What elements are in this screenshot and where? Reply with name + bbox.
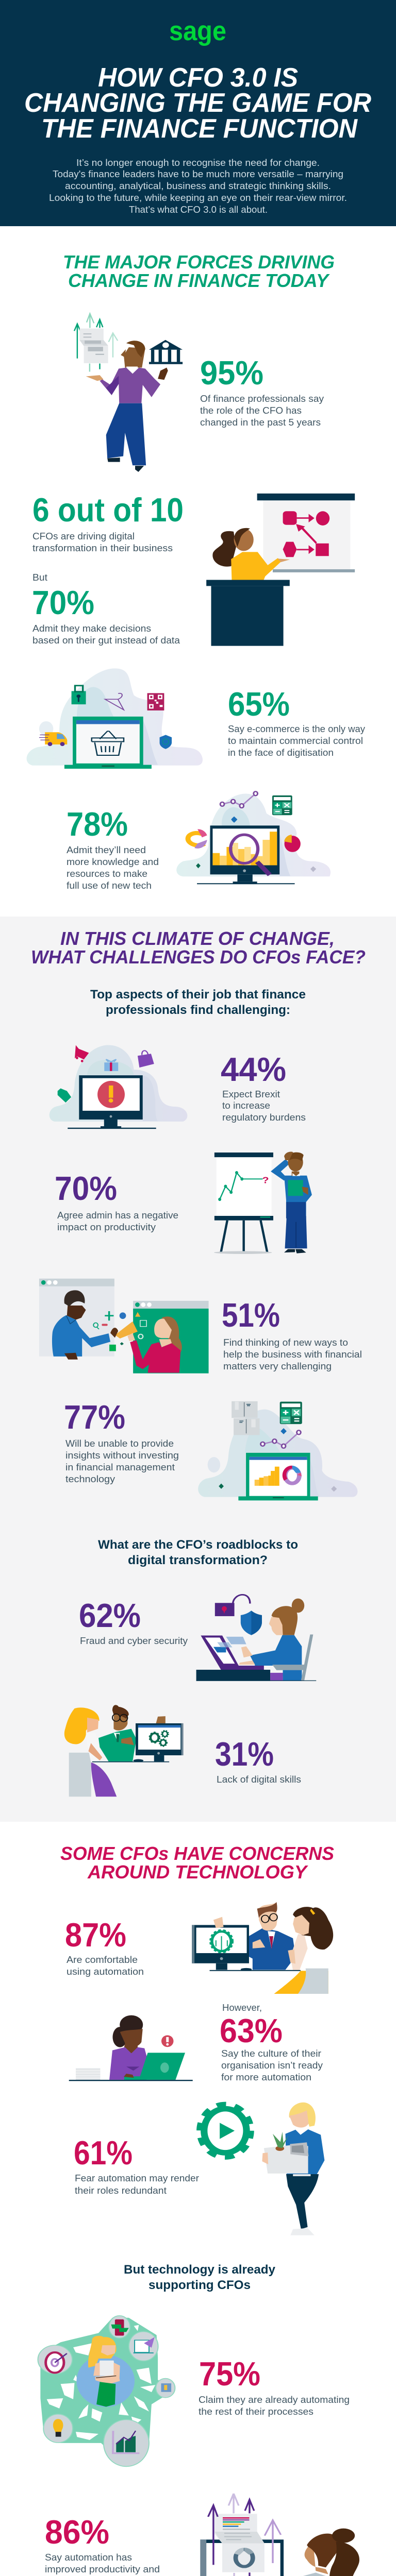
subheading: roadblocks: What are the CFO’s roadblocks to <box>98 1538 298 1552</box>
illustration: colleagues exchanging message in video windows <box>39 1279 209 1374</box>
illustration: financial management laptop <box>198 1401 358 1500</box>
intro text: Looking to the future, while keeping an eye on their rear-view mirror. <box>49 193 347 203</box>
intro text: Today's finance leaders have to be much more versatile – marrying <box>53 169 343 179</box>
stat: 87%: 87% <box>65 1916 126 1954</box>
subheading: top aspects: Top aspects of their job that finance <box>90 988 306 1002</box>
panel: challenges <box>0 917 396 1822</box>
illustration: colleagues at monitor with gears <box>64 1705 184 1797</box>
stat: 77%: 77% <box>64 1398 125 1436</box>
stat: 44%: to increase <box>222 1100 270 1111</box>
illustration: automation cog and worried worker with box <box>199 2103 324 2235</box>
illustration: man juggling document and bank <box>74 314 183 472</box>
illustration: analytics monitor <box>176 791 331 884</box>
illustration: woman at centre of network <box>38 2316 175 2466</box>
stat: 78% knowledge <box>67 805 159 891</box>
stat: 51%: matters very challenging <box>223 1361 332 1371</box>
stat: 63%: Say the culture of their <box>221 2048 321 2059</box>
illustration: confused man at easel: ? <box>262 1175 269 1185</box>
stat: 63%: organisation isn’t ready <box>221 2060 323 2071</box>
stat: 86%: Say automation has <box>45 2552 132 2563</box>
stat: 77%: insights without investing <box>65 1450 179 1461</box>
stat: 77%: in financial management <box>65 1462 175 1472</box>
stat: 95% <box>200 354 324 428</box>
stat: 78% knowledge: 78% <box>67 805 128 843</box>
heading: technology concerns: AROUND TECHNOLOGY <box>87 1861 308 1883</box>
subheading: technology supporting CFOs <box>124 2263 276 2292</box>
stat: 87%: using automation <box>67 1966 144 1977</box>
subheading: technology supporting CFOs: But technology is already <box>124 2263 276 2277</box>
stat: 78% knowledge: full use of new tech <box>67 880 152 891</box>
stat: 78% knowledge: more knowledge and <box>67 856 159 867</box>
stat: 51%: Find thinking of new ways to <box>223 1337 348 1348</box>
illustration: monitor alert <box>50 1045 187 1129</box>
stat: 63%: However, <box>222 2002 262 2013</box>
stat: 77%: Will be unable to provide <box>65 1438 174 1449</box>
stat: 86%: 86% <box>45 2513 109 2551</box>
heading: challenges: IN THIS CLIMATE OF CHANGE, <box>60 928 335 949</box>
stat: 87%: Are comfortable <box>67 1954 138 1965</box>
stat: 70% admin: 70% <box>55 1170 117 1207</box>
stat: 75%: the rest of their processes <box>199 2406 314 2417</box>
illustration: woman at monitor with rising report <box>200 2494 359 2576</box>
stat: 75%: 75% <box>199 2355 260 2393</box>
stat: 44% <box>221 1050 306 1123</box>
stat: 51%: 51% <box>222 1296 280 1334</box>
stat: 65%: to maintain commercial control <box>228 735 363 746</box>
logo: sage: sage <box>169 16 226 46</box>
stat: 65% <box>228 685 366 758</box>
stat: 65%: in the face of digitisation <box>228 747 334 758</box>
illustration: woman presenting process flow at podium <box>206 494 355 646</box>
intro text: It’s no longer enough to recognise the need for change. <box>76 158 320 168</box>
heading: major forces: THE MAJOR FORCES DRIVING <box>63 251 335 273</box>
stat: 44%: 44% <box>221 1050 286 1088</box>
stat: 70% gut decisions: But <box>32 572 47 583</box>
stat: 44%: regulatory burdens <box>222 1112 306 1123</box>
stat: 77%: technology <box>65 1473 116 1484</box>
stat: 61%: 61% <box>74 2134 133 2172</box>
panel: major forces <box>27 251 366 891</box>
stat: 31% <box>215 1735 301 1785</box>
illustration: woman on laptop with security icons <box>196 1595 316 1681</box>
illustration: confused man at easel <box>214 1152 312 1254</box>
stat: 70% admin: impact on productivity <box>57 1222 156 1232</box>
stat: 62% <box>79 1597 188 1646</box>
stat: 70% gut decisions: based on their gut instead of data <box>32 635 180 646</box>
heading: technology concerns: SOME CFOs HAVE CONCERNS <box>60 1843 334 1864</box>
heading: major forces <box>63 251 335 291</box>
stat: 95%: changed in the past 5 years <box>200 417 321 428</box>
heading: major forces: CHANGE IN FINANCE TODAY <box>68 270 330 291</box>
subheading: roadblocks: digital transformation? <box>128 1553 268 1567</box>
intro text: That’s what CFO 3.0 is all about. <box>129 205 268 215</box>
stat: 65%: Say e-commerce is the only way <box>228 723 366 734</box>
stat: 62%: 62% <box>79 1597 141 1634</box>
stat: 31%: 31% <box>215 1735 274 1773</box>
panel: header <box>0 0 396 226</box>
stat: 70% admin: Agree admin has a negative <box>57 1210 178 1221</box>
stat: 51% <box>222 1296 362 1371</box>
stat: 95%: 95% <box>200 354 263 392</box>
stat: 61%: Fear automation may render <box>75 2173 199 2183</box>
subheading: technology supporting CFOs: supporting CFOs <box>148 2278 251 2292</box>
illustration: colleagues at monitor with cog <box>192 1902 333 1994</box>
title: HOW CFO 3.0 IS <box>98 63 298 93</box>
stat: 65%: 65% <box>228 685 290 723</box>
stat: 86% <box>45 2513 160 2576</box>
stat: 70% gut decisions: 70% <box>32 584 94 621</box>
stat: 44%: Expect Brexit <box>222 1089 280 1099</box>
stat: 6 out of 10: 6 out of 10 <box>32 491 184 529</box>
stat: 6 out of 10 <box>32 491 184 553</box>
subheading: roadblocks <box>98 1538 298 1567</box>
stat: 63%: for more automation <box>221 2072 311 2082</box>
stat: 70% gut decisions: Admit they make decisions <box>32 623 151 634</box>
title: THE FINANCE FUNCTION <box>41 114 358 144</box>
stat: 86%: improved productivity and <box>45 2564 160 2574</box>
stat: 75%: Claim they are already automating <box>199 2394 350 2405</box>
stat: 63% <box>220 2002 323 2082</box>
stat: 70% gut decisions <box>32 572 180 646</box>
panel: technology concerns <box>32 1843 369 2576</box>
heading: challenges <box>31 928 366 968</box>
stat: 63%: 63% <box>220 2012 283 2049</box>
subheading: top aspects: professionals find challenging: <box>106 1003 290 1017</box>
stat: 78% knowledge: Admit they’ll need <box>67 844 146 855</box>
title <box>24 63 371 144</box>
stat: 78% knowledge: resources to make <box>67 868 147 879</box>
stat: 87% <box>65 1916 144 1977</box>
intro text <box>49 158 347 215</box>
stat: 61% <box>74 2134 199 2196</box>
intro text: accounting, analytical, business and strategic thinking skills. <box>65 181 331 191</box>
stat: 6 out of 10: transformation in their business <box>32 543 173 553</box>
stat: 95%: Of finance professionals say <box>200 393 324 404</box>
subheading: top aspects <box>90 988 306 1017</box>
stat: 95%: the role of the CFO has <box>200 405 302 416</box>
stat: 31%: Lack of digital skills <box>217 1774 301 1785</box>
stat: 75% <box>199 2355 350 2417</box>
stat: 62%: Fraud and cyber security <box>80 1635 188 1646</box>
stat: 61%: their roles redundant <box>75 2185 167 2196</box>
stat: 51%: help the business with financial <box>223 1349 362 1360</box>
title: CHANGING THE GAME FOR <box>24 88 371 118</box>
illustration: e-commerce laptop <box>27 668 203 769</box>
heading: technology concerns <box>60 1843 334 1883</box>
stat: 6 out of 10: CFOs are driving digital <box>32 531 135 541</box>
stat: 77% <box>64 1398 179 1484</box>
illustration: worried woman at laptop <box>69 2015 193 2081</box>
stat: 70% admin <box>55 1170 178 1232</box>
heading: challenges: WHAT CHALLENGES DO CFOs FACE? <box>31 946 366 968</box>
